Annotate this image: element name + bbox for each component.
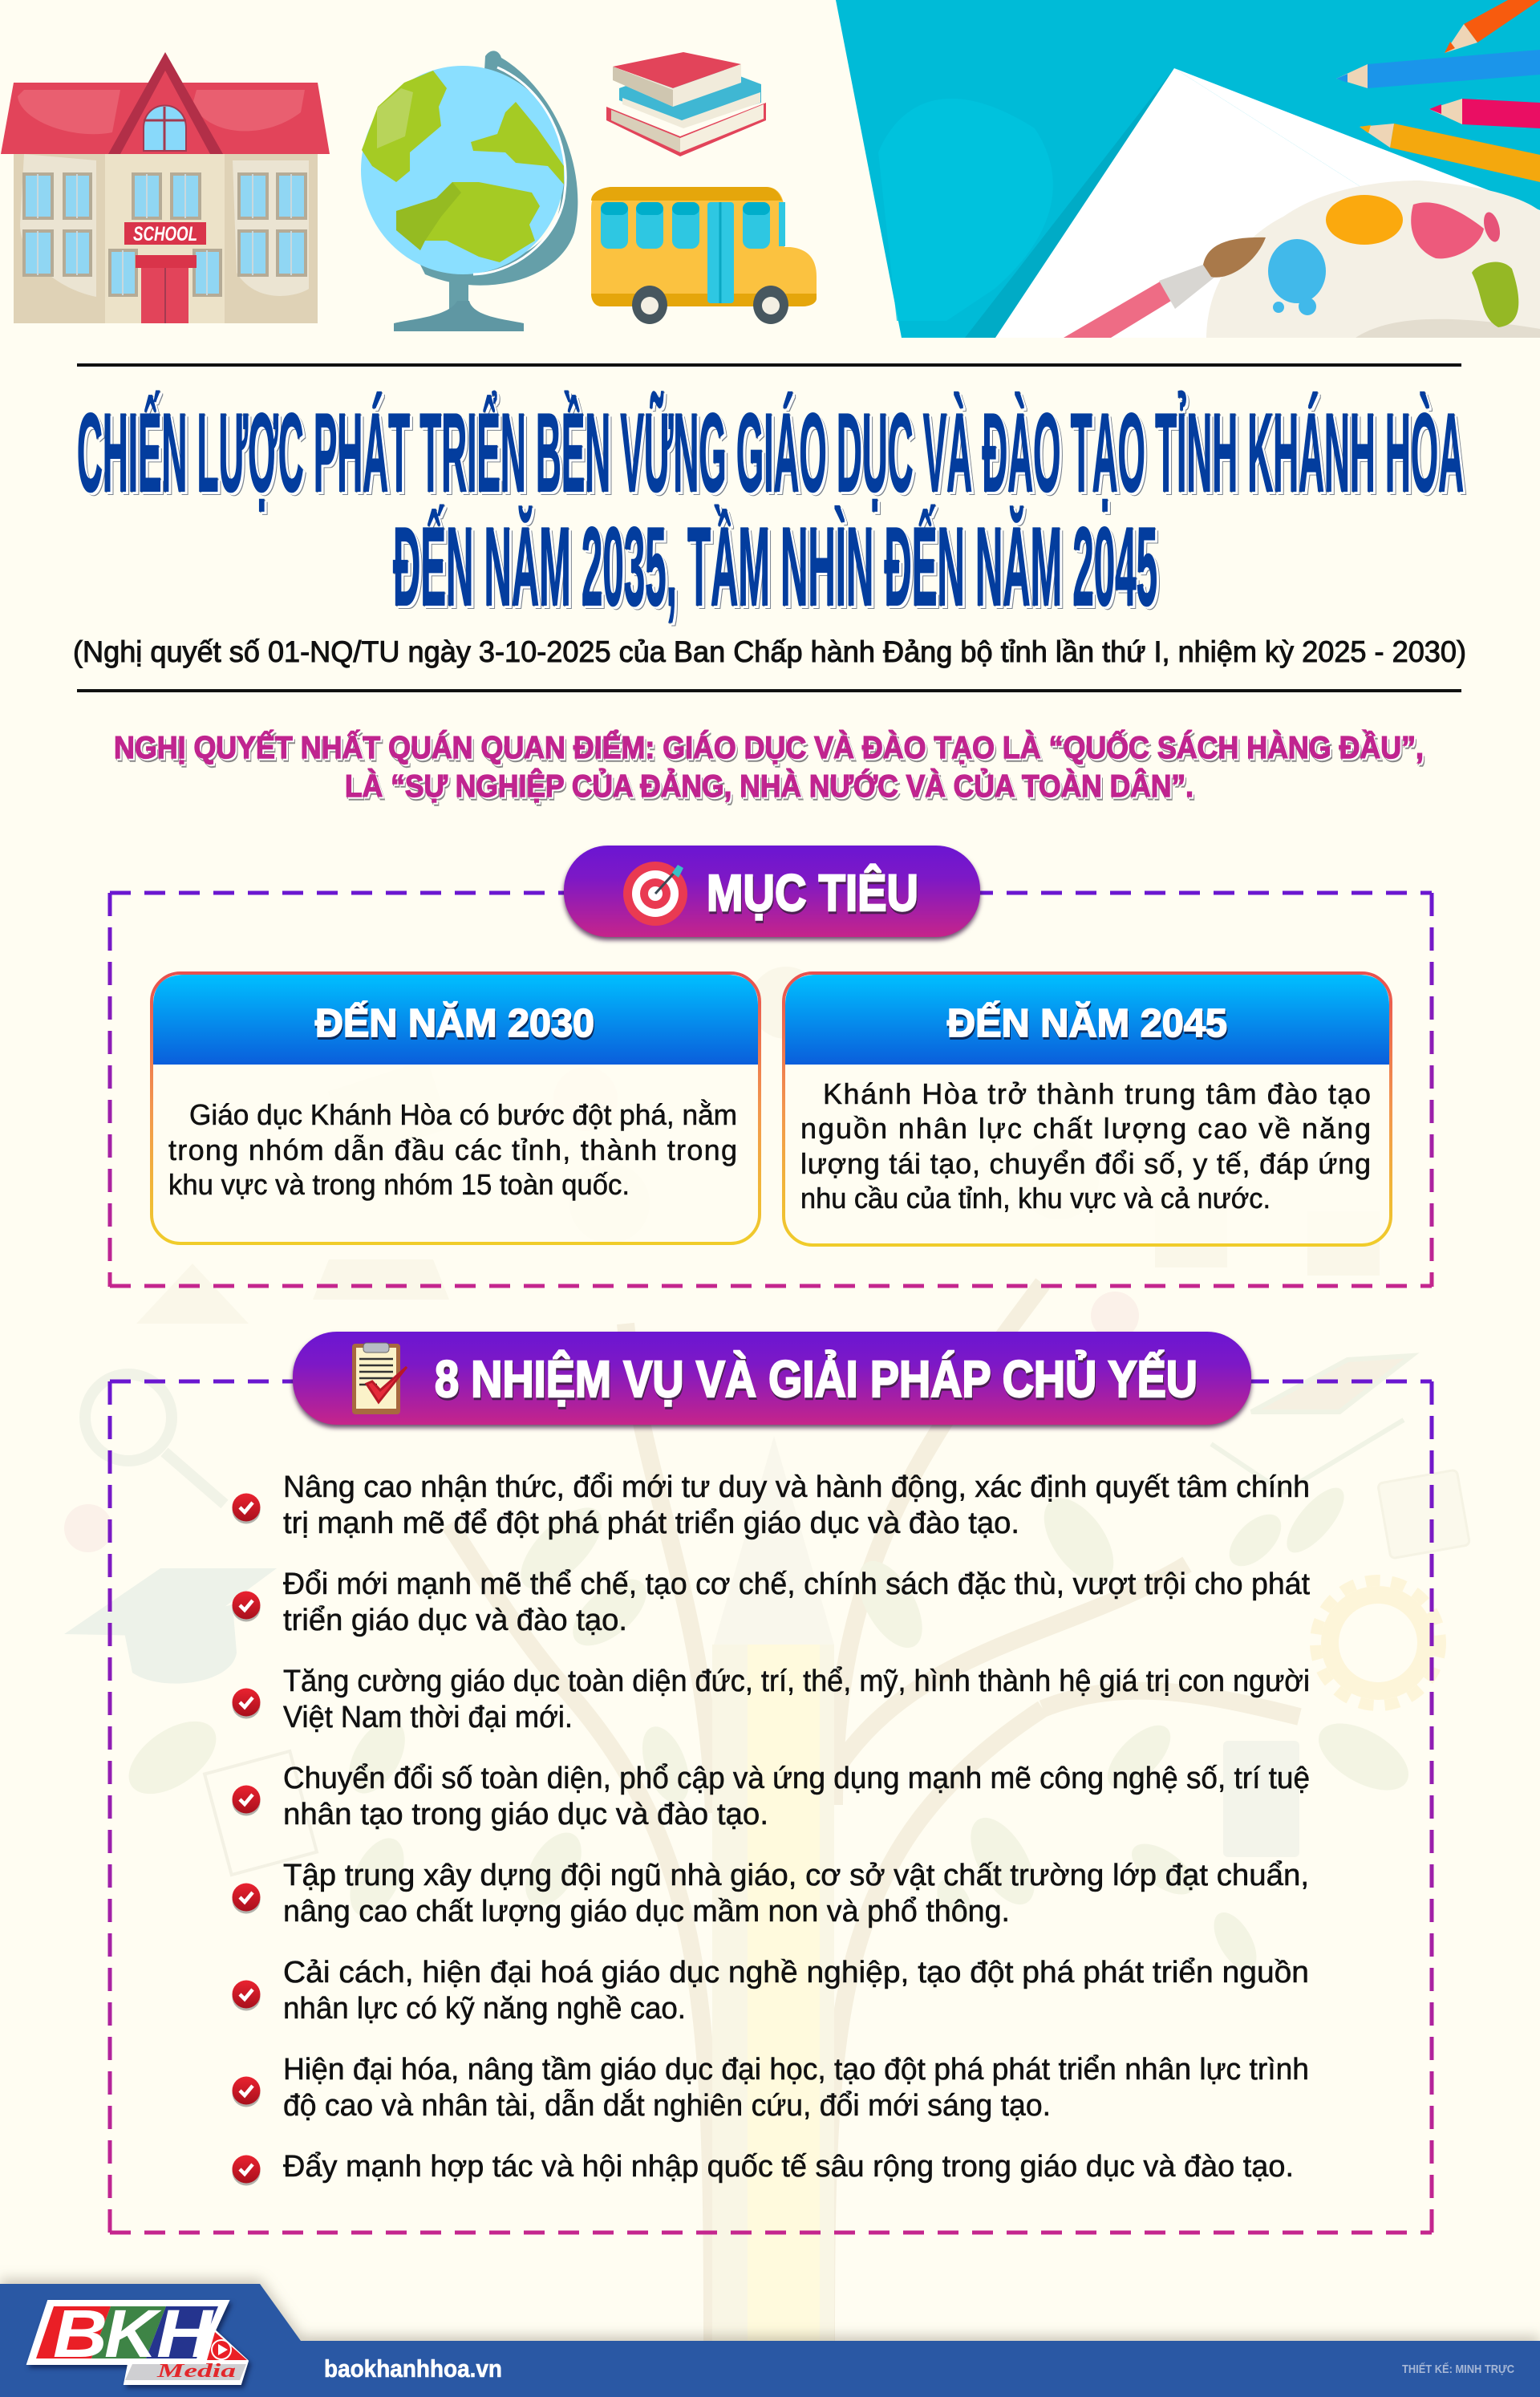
task 6: nhân lực có kỹ năng nghề cao. [283, 1992, 686, 2026]
icon: red check [233, 1786, 260, 1816]
body text 2045 [800, 1077, 1371, 1215]
body text 2045: Khánh Hòa trở thành trung tâm đào tạo [823, 1077, 1371, 1110]
paint brush [1064, 237, 1266, 338]
heading pill: objectives: MỤC TIÊU [707, 863, 918, 922]
logo: BKH Media: B [53, 2296, 107, 2371]
resolution subtitle: (Nghị quyết số 01-NQ/TU ngày 3-10-2025 của Ban Chấp hành Đảng bộ tỉnh lần thứ I, nhiệm kỳ 2025 - 2030) [73, 635, 1466, 668]
watermark: education tree background [64, 967, 1470, 2342]
viewpoint statement: NGHỊ QUYẾT NHẤT QUÁN QUAN ĐIỂM: GIÁO DỤC VÀ ĐÀO TẠO LÀ “QUỐC SÁCH HÀNG ĐẦU”, [114, 729, 1424, 765]
palette and gears watermark upper area [136, 967, 1380, 1324]
palette [1206, 180, 1540, 338]
icon: red check [233, 2076, 260, 2107]
task 8: Đẩy mạnh hợp tác và hội nhập quốc tế sâu rộng trong giáo dục và đào tạo. [283, 2150, 1294, 2184]
task 3: Việt Nam thời đại mới. [283, 1701, 573, 1734]
body text 2030 [168, 1098, 737, 1201]
task 4: nhân tạo trong giáo dục và đào tạo. [283, 1798, 768, 1831]
logo: BKH Media: Media [156, 2361, 236, 2382]
panel: tasks dashed frame [110, 1381, 1432, 2233]
task 4: Chuyển đổi số toàn diện, phổ cập và ứng dụng mạnh mẽ công nghệ số, trí tuệ [283, 1762, 1310, 1795]
designer credit: THIẾT KẾ: MINH TRỰC [1402, 2363, 1514, 2376]
heading pill: tasks: 8 NHIỆM VỤ VÀ GIẢI PHÁP CHỦ YẾU [435, 1349, 1198, 1408]
icon: red check [233, 1884, 260, 1914]
viewpoint statement: LÀ “SỰ NGHIỆP CỦA ĐẢNG, NHÀ NƯỚC VÀ CỦA TOÀN DÂN”. [345, 769, 1194, 804]
illustration: globe [361, 51, 578, 331]
body text 2045: nguồn nhân lực chất lượng cao về năng [800, 1112, 1371, 1145]
panel: target to 2030: ĐẾN NĂM 2030 [315, 1002, 594, 1045]
task 2: Đổi mới mạnh mẽ thể chế, tạo cơ chế, chính sách đặc thù, vượt trội cho phát [283, 1568, 1310, 1601]
task 7: Hiện đại hóa, nâng tầm giáo dục đại học, tạo đột phá phát triển nhân lực trình [283, 2053, 1309, 2087]
task 6 [233, 1956, 1309, 2026]
icon: target [623, 862, 687, 926]
icon: red check [233, 2155, 260, 2185]
task 6: Cải cách, hiện đại hoá giáo dục nghề nghiệp, tạo đột phá phát triển nguồn [283, 1956, 1309, 1989]
task 1: trị mạnh mẽ để đột phá phát triển giáo dục và đào tạo. [283, 1507, 1019, 1540]
icon: red check [233, 1494, 260, 1524]
task 7: độ cao và nhân tài, dẫn dắt nghiên cứu, đổi mới sáng tạo. [283, 2088, 1051, 2123]
logo: BKH Media: H [156, 2296, 215, 2371]
header band 2045 [785, 975, 1389, 1065]
task 5: Tập trung xây dựng đội ngũ nhà giáo, cơ sở vật chất trường lớp đạt chuẩn, [283, 1859, 1309, 1892]
illustration: school bus [591, 187, 817, 324]
mortarboard watermark [64, 1568, 277, 1684]
logo: BKH Media: K [104, 2296, 162, 2371]
illustration: art panel with paper, palette and pencils [836, 0, 1540, 338]
panel: target to 2045: ĐẾN NĂM 2045 [947, 1002, 1227, 1045]
body text 2045: nhu cầu của tỉnh, khu vực và cả nước. [800, 1182, 1270, 1215]
body text 2045: lượng tái tạo, chuyển đổi số, y tế, đáp ứng [800, 1147, 1371, 1180]
task 1 [233, 1470, 1310, 1540]
pencils [1336, 0, 1540, 182]
body text 2030: Giáo dục Khánh Hòa có bước đột phá, nằm [189, 1098, 737, 1131]
document watermark [1223, 1741, 1299, 1857]
illustration: school building [1, 52, 330, 323]
task 5 [233, 1859, 1309, 1929]
website: baokhanhhoa.vn [324, 2354, 502, 2383]
panel: target to 2030 [152, 973, 760, 1243]
task 1: Nâng cao nhận thức, đổi mới tư duy và hành động, xác định quyết tâm chính [283, 1470, 1310, 1504]
gear watermark [1315, 1580, 1441, 1705]
task 4 [233, 1762, 1310, 1831]
second divider [77, 689, 1461, 692]
school door [136, 255, 197, 323]
school windows [24, 174, 306, 295]
panel: objectives dashed frame [110, 893, 1432, 1287]
icon: red check [233, 1688, 260, 1718]
task 3: Tăng cường giáo dục toàn diện đức, trí, thể, mỹ, hình thành hệ giá trị con người [283, 1665, 1310, 1698]
icon: clipboard with check [352, 1343, 407, 1414]
open book watermark [1378, 1470, 1470, 1559]
illustration: stacked books [606, 52, 766, 156]
school sign: SCHOOL [133, 223, 197, 245]
footer band [0, 2284, 1540, 2397]
heading pill: objectives [564, 846, 980, 937]
school dormer window [144, 106, 186, 151]
panel: target to 2045 [784, 973, 1391, 1245]
header band 2030 [153, 975, 758, 1065]
body text 2030: trong nhóm dẫn đầu các tỉnh, thành trong [168, 1134, 737, 1166]
task 5: nâng cao chất lượng giáo dục mầm non và phổ thông. [283, 1895, 1010, 1929]
logo: BKH Media [27, 2296, 248, 2384]
task 7 [233, 2053, 1309, 2123]
task 2 [233, 1568, 1310, 1637]
magnifier watermark [85, 1374, 225, 1504]
stacked books watermark [1211, 1356, 1412, 1492]
icon: red check [233, 1980, 260, 2010]
title [77, 391, 1464, 629]
task 2: triển giáo dục và đào tạo. [283, 1604, 627, 1637]
heading pill: tasks [293, 1332, 1251, 1425]
body text 2030: khu vực và trong nhóm 15 toàn quốc. [168, 1168, 630, 1201]
icon: red check [233, 1592, 260, 1622]
task 3 [233, 1665, 1310, 1734]
top divider [77, 363, 1461, 367]
viewpoint statement [114, 729, 1424, 804]
